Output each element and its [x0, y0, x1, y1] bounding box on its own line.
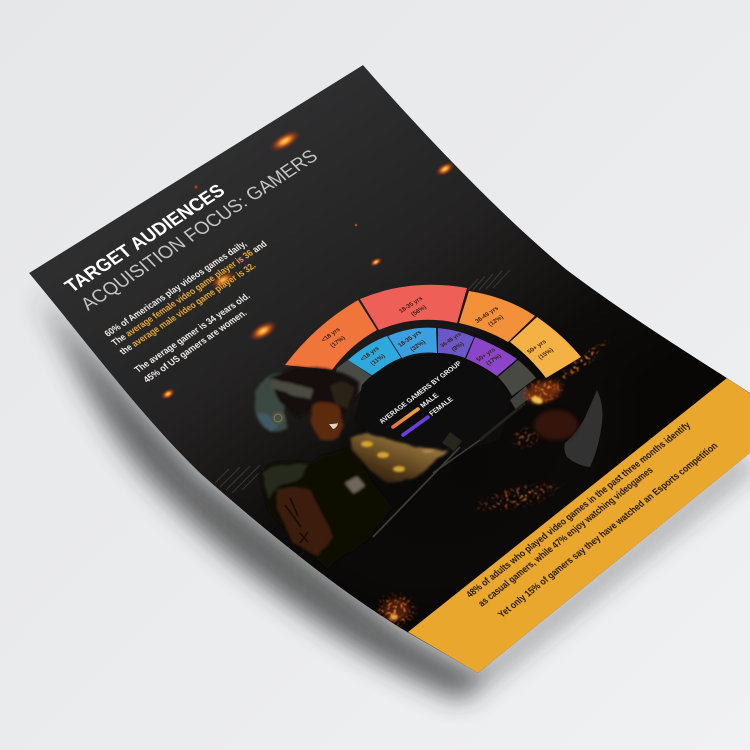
lower ember cluster: [374, 591, 418, 629]
goggles: [330, 383, 354, 409]
segment: under 18 male: [285, 300, 377, 370]
male swatch: [393, 409, 418, 427]
legend: [378, 360, 464, 435]
ring labels: (32%): [410, 340, 427, 353]
vest: [262, 464, 308, 500]
ember field: [467, 426, 569, 521]
ring labels: <18 yrs: [360, 346, 381, 363]
ring labels: 50+ yrs: [476, 347, 498, 363]
helmet top: [270, 367, 359, 418]
helmet strap: [272, 379, 312, 399]
soldier illustration: [254, 367, 525, 568]
ring labels: (17%): [486, 354, 503, 367]
outer ring: male: [285, 285, 581, 378]
shoulder patch: [345, 476, 365, 493]
ember core: [390, 614, 398, 620]
segment: 50+ male: [510, 317, 581, 378]
tattooed arm: [277, 487, 333, 556]
translucent arc fragment: [564, 390, 602, 467]
ring labels: (15%): [538, 348, 555, 361]
helmet back: [254, 372, 287, 431]
legend male: MALE: [419, 392, 441, 409]
footer text: as casual gamers, while 47% enjoy watching videogames: [476, 465, 656, 609]
ring labels: 36-49 yrs: [439, 332, 463, 349]
ring labels: 18-35 yrs: [397, 329, 424, 349]
intro text: [102, 239, 270, 385]
segment: 18-35 female: [388, 328, 437, 358]
title bold: TARGET AUDIENCES: [61, 181, 230, 297]
segment: 36-49 female: [438, 328, 474, 358]
poster dark background: [29, 65, 750, 673]
sleeve highlights: [361, 441, 434, 472]
flash core: [530, 395, 544, 405]
title block: [61, 146, 322, 315]
ring labels: (12%): [488, 315, 505, 328]
ring labels: [321, 296, 555, 367]
flash glow: [534, 410, 578, 440]
inner ring: female: [330, 328, 536, 397]
poster sheet: [29, 65, 750, 683]
segment: 36-49 male: [459, 291, 535, 342]
intro text: 45% of US gamers are women.: [141, 308, 250, 385]
ring labels: (56%): [411, 305, 428, 318]
ember haze: [383, 599, 409, 621]
intro text: 60% of Americans play videos games daily,: [102, 239, 249, 339]
intro text: the average male video game player is 32.: [117, 261, 259, 357]
grey arc chip below ring: [510, 386, 529, 409]
ring chart: [285, 284, 581, 428]
embers upper: [509, 426, 541, 450]
ember specks: [374, 591, 418, 629]
intro text: The average female video game player is 36 and: [109, 239, 270, 348]
segment: empty left: [336, 360, 372, 396]
rifle: [373, 403, 525, 537]
lower dark shading: [321, 573, 372, 610]
helmet ear cup: [271, 411, 285, 425]
intro text: The average gamer is 34 years old.: [132, 291, 253, 375]
ring labels: 18-35 yrs: [398, 296, 425, 315]
flash cluster: [516, 371, 570, 411]
tan sleeve: [350, 433, 448, 483]
female swatch: [403, 417, 428, 435]
soldier silhouette: [254, 367, 448, 568]
muzzle flash: [516, 334, 614, 440]
helmet badge: [274, 414, 282, 422]
ring labels: <18 yrs: [321, 327, 342, 344]
ring labels: 50+ yrs: [527, 339, 549, 355]
ring labels: (17%): [330, 336, 347, 349]
legend female: FEMALE: [428, 396, 455, 417]
footer text: 48% of adults who played video games in the past three months identify: [464, 420, 693, 600]
central dark disc: [355, 353, 512, 428]
torso: [258, 446, 392, 568]
legend title: AVERAGE GAMERS BY GROUP: [378, 360, 464, 425]
decorative glows: [159, 125, 458, 402]
tattoo marks: [285, 498, 308, 543]
orange footer band: [408, 378, 750, 673]
segment: empty right: [498, 360, 536, 396]
flash streak: [550, 334, 614, 390]
ring labels: (11%): [370, 354, 387, 367]
helmet lower blue: [258, 413, 278, 431]
flash haze: [523, 378, 563, 406]
smile: [329, 423, 338, 429]
segment: 18-35 male: [360, 285, 467, 330]
embers right: [467, 473, 569, 521]
face: [310, 402, 344, 441]
paper shadow: [35, 290, 750, 700]
ring labels: (8%): [451, 342, 466, 353]
ring labels: 36-49 yrs: [474, 305, 501, 325]
hatch marks: [215, 270, 510, 493]
segment: 50+ female: [466, 337, 517, 376]
subtitle: ACQUISITION FOCUS: GAMERS: [77, 146, 322, 315]
segment: under 18 female: [348, 336, 401, 376]
